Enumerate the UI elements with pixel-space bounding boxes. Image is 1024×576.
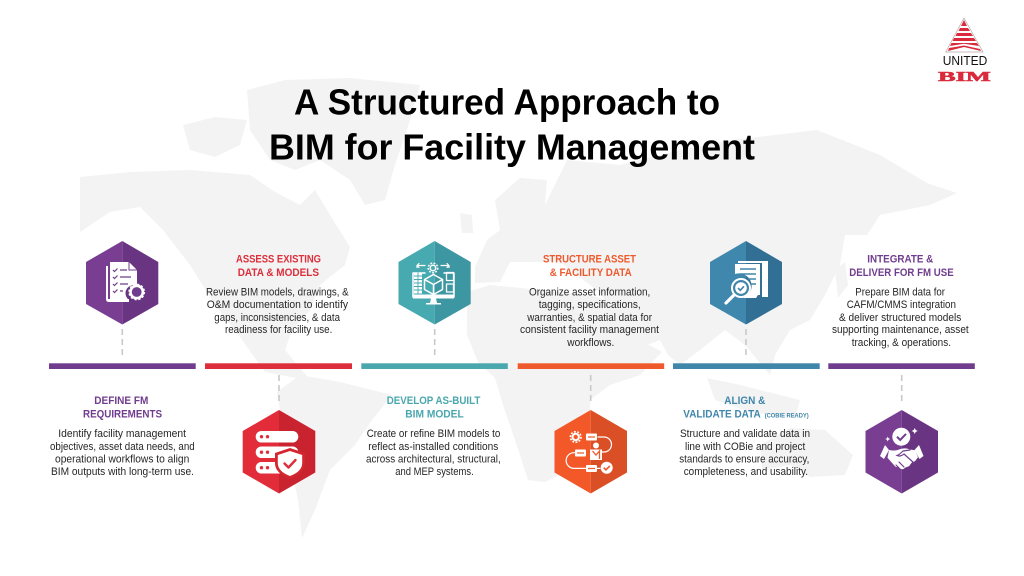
panel: step 1 define FM requirements <box>50 241 195 478</box>
description: line with COBie and project <box>685 441 805 453</box>
heading: & FACILITY DATA <box>550 267 632 279</box>
title <box>269 82 755 168</box>
heading <box>83 395 162 421</box>
description <box>520 287 659 349</box>
heading: REQUIREMENTS <box>83 409 162 421</box>
description: CAFM/CMMS integration <box>847 299 956 311</box>
description: consistent facility management <box>520 324 659 336</box>
description: and MEP systems. <box>395 466 474 478</box>
title: A Structured Approach to <box>294 82 720 122</box>
description <box>832 287 969 349</box>
description: Organize asset information, <box>529 287 650 299</box>
heading: (COBIE READY) <box>765 414 809 420</box>
icon: handshake with check <box>866 410 938 494</box>
connector <box>590 375 592 402</box>
connector <box>434 329 436 356</box>
timeline bar: step 2 <box>205 363 352 369</box>
description: BIM outputs with long-term use. <box>51 466 194 478</box>
description: & deliver structured models <box>839 312 961 324</box>
timeline bar: step 6 <box>828 363 975 369</box>
description: standards to ensure accuracy, <box>679 454 809 466</box>
icon: workflow process <box>554 410 627 494</box>
description: reflect as-installed conditions <box>368 441 498 453</box>
panel: step 4 structure asset and facility data <box>520 254 659 494</box>
description: completeness, and usability. <box>684 466 808 478</box>
heading: DEVELOP AS-BUILT <box>387 395 481 407</box>
connector <box>278 375 280 402</box>
description <box>50 428 195 478</box>
description: readiness for facility use. <box>225 324 332 336</box>
heading: DATA & MODELS <box>238 267 319 279</box>
logo: United BIM: BIM <box>938 70 991 85</box>
description: O&M documentation to identify <box>207 299 349 311</box>
description <box>206 287 349 336</box>
description: operational workflows to align <box>55 454 189 466</box>
description: across architectural, structural, <box>366 454 501 466</box>
description: gaps, inconsistencies, & data <box>214 312 340 324</box>
description: warranties, & spatial data for <box>526 312 652 324</box>
connector <box>121 329 123 356</box>
description: supporting maintenance, asset <box>832 324 969 336</box>
logo: United BIM: UNITED <box>943 53 987 68</box>
logo: United BIM <box>938 18 991 85</box>
connector <box>901 375 903 402</box>
heading <box>543 254 636 279</box>
description: Structure and validate data in <box>680 428 810 440</box>
heading <box>849 254 954 279</box>
heading <box>683 395 809 421</box>
heading <box>236 254 321 279</box>
heading: INTEGRATE & <box>867 254 933 266</box>
panel: step 2 assess existing data and models <box>206 254 349 494</box>
heading: DELIVER FOR FM USE <box>849 267 954 279</box>
description: workflows. <box>566 337 614 349</box>
description: tagging, specifications, <box>539 299 641 311</box>
description <box>366 428 501 478</box>
heading: DEFINE FM <box>94 395 148 407</box>
panel: step 5 align and validate data <box>679 241 810 478</box>
icon: document with magnifier <box>710 241 782 324</box>
heading <box>387 395 481 421</box>
world map background <box>80 78 957 538</box>
title: BIM for Facility Management <box>269 126 755 168</box>
connector <box>745 329 747 356</box>
description: Review BIM models, drawings, & <box>206 287 349 299</box>
panel: step 6 integrate and deliver <box>832 254 969 494</box>
timeline bar: step 3 <box>361 363 508 369</box>
icon: checklist document with gear <box>86 241 158 324</box>
icon: monitor with BIM cube <box>398 241 471 324</box>
timeline bar: step 4 <box>518 363 664 369</box>
timeline bar: step 5 <box>673 363 820 369</box>
heading: ALIGN & <box>724 395 765 407</box>
description: Prepare BIM data for <box>855 287 945 299</box>
heading: BIM MODEL <box>405 409 464 421</box>
description: Identify facility management <box>58 428 186 440</box>
timeline bar: step 1 <box>49 363 196 369</box>
icon: secure server <box>243 410 315 494</box>
heading: VALIDATE DATA <box>683 409 761 421</box>
heading: STRUCTURE ASSET <box>543 254 636 266</box>
description: objectives, asset data needs, and <box>50 441 195 453</box>
description: tracking, & operations. <box>852 337 951 349</box>
heading: ASSESS EXISTING <box>236 254 321 266</box>
panel: step 3 develop as-built BIM model <box>366 241 501 478</box>
description <box>679 428 810 478</box>
description: Create or refine BIM models to <box>367 428 500 440</box>
